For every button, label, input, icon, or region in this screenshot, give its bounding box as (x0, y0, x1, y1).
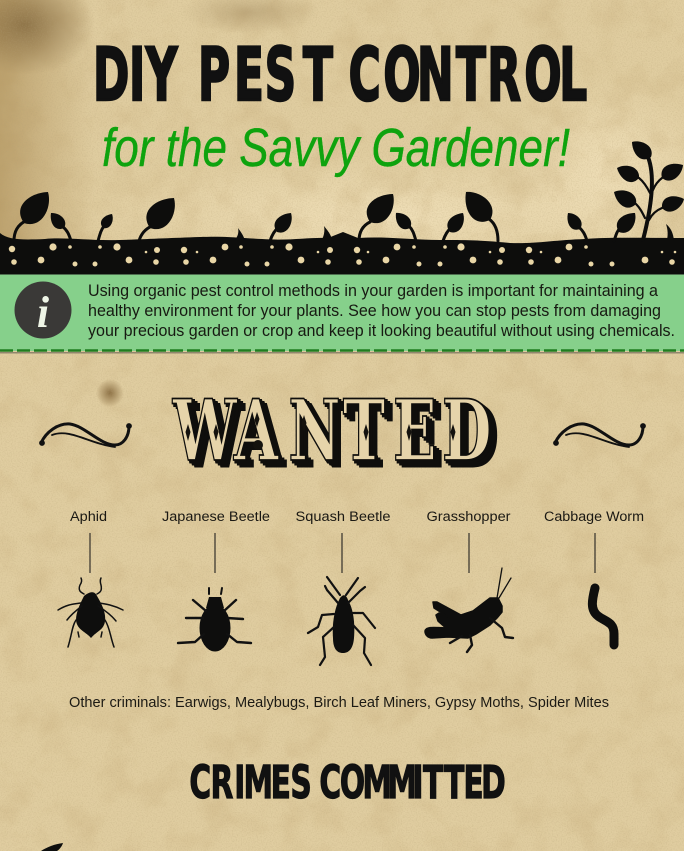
connector lines (90, 533, 595, 573)
pest labels (70, 509, 644, 525)
wanted heading: WANTED (179, 388, 499, 486)
icon: aphid (58, 578, 123, 647)
pest labels: Aphid (70, 509, 107, 525)
wanted heading: WANTED (176, 386, 496, 484)
subtitle: for the Savvy Gardener! (102, 118, 570, 178)
title: DIY PEST CONTROL (93, 33, 587, 118)
other criminals text: Other criminals: Earwigs, Mealybugs, Birch Leaf Miners, Gypsy Moths, Spider Mites (69, 695, 609, 711)
icon: squash beetle (308, 577, 375, 665)
intro text (88, 282, 675, 340)
crimes committed heading: CRIMES COMMITTED (189, 757, 506, 809)
pest labels: Grasshopper (426, 509, 511, 525)
wanted heading: WANTED (174, 384, 494, 482)
pest labels: Cabbage Worm (544, 509, 644, 525)
pest labels: Japanese Beetle (162, 509, 270, 525)
soil (0, 232, 684, 274)
intro text: Using organic pest control methods in your garden is important for maintaining a (88, 282, 658, 300)
icon: info (14, 282, 72, 338)
leaf cut off at page bottom (41, 843, 63, 851)
info banner (0, 274, 684, 354)
pest labels: Squash Beetle (296, 509, 391, 525)
icon: japanese beetle (178, 588, 251, 652)
icon: info: i (37, 288, 50, 337)
wanted heading: WANTED (172, 382, 492, 480)
intro text: healthy environment for your plants. See how you can stop pests from damaging (88, 302, 661, 320)
icon: grasshopper (425, 568, 513, 652)
ornaments (186, 412, 456, 450)
plants (14, 157, 662, 241)
icon: cabbage worm (592, 588, 614, 645)
intro text: your precious garden or crop and keep it looking beautiful without using chemicals. (88, 322, 675, 340)
flourish left (40, 424, 131, 447)
soil dots (9, 243, 676, 266)
flourish right (554, 424, 645, 447)
garden silhouette (0, 136, 684, 274)
